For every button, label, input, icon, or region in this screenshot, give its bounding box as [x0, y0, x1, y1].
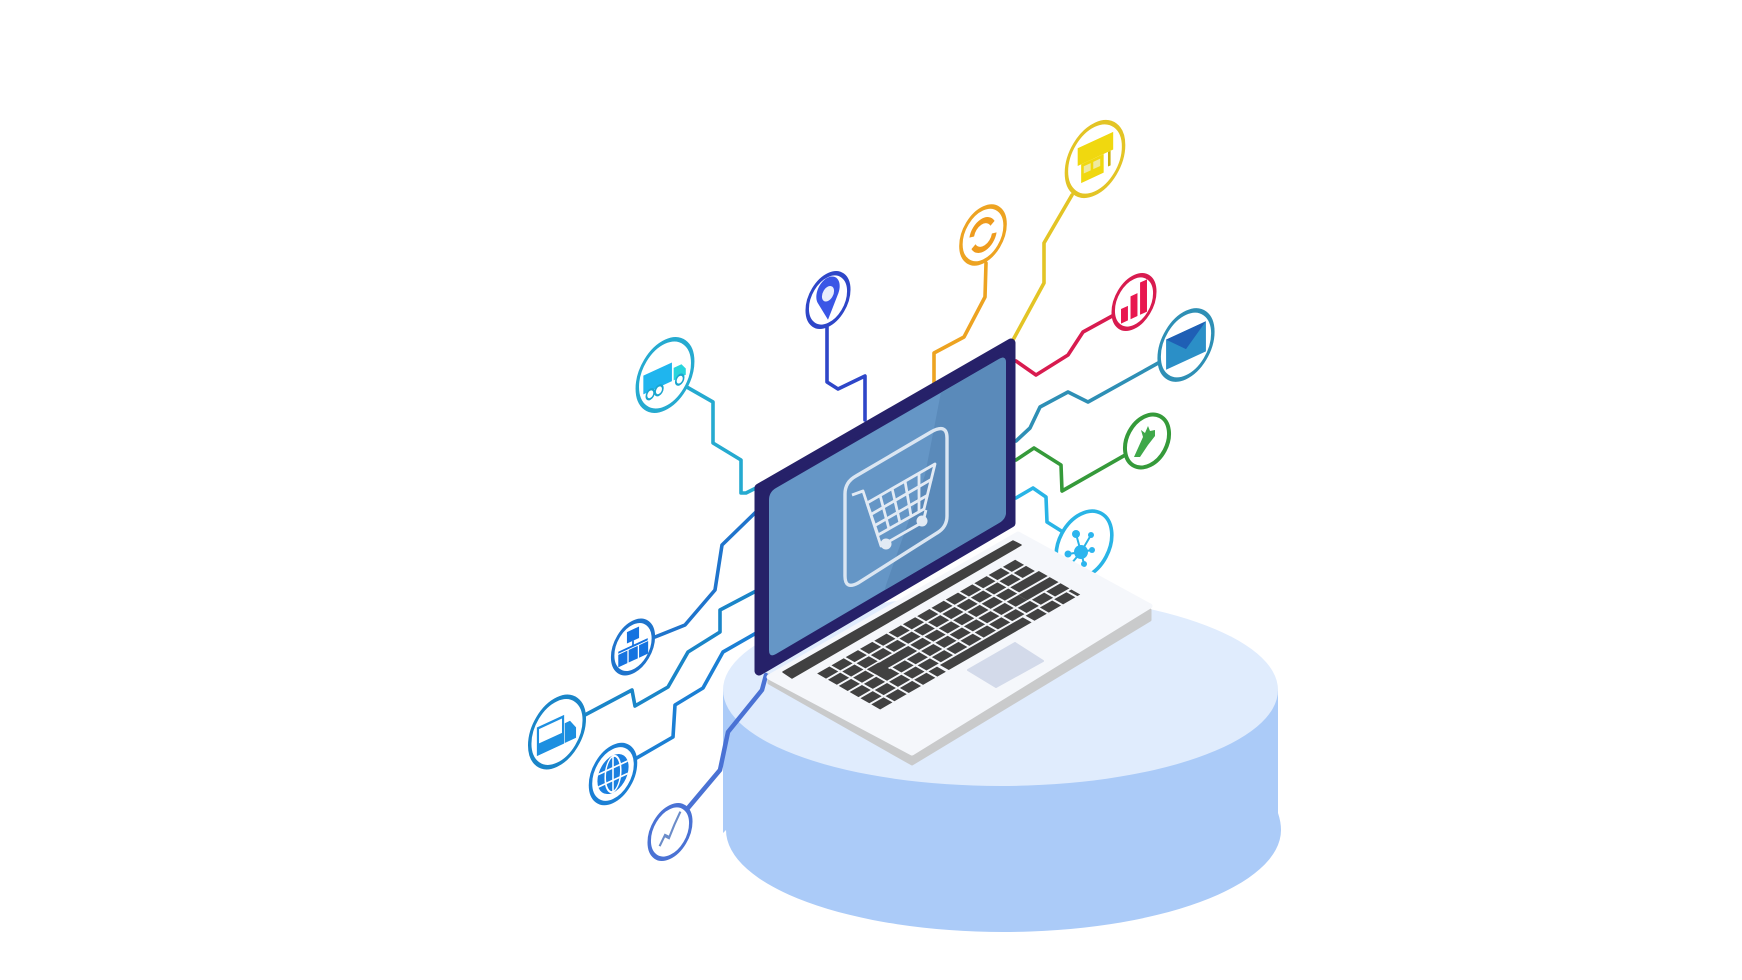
connector: store: [1013, 195, 1072, 340]
connector: boxes: [655, 510, 758, 637]
connector: location pin: [827, 327, 865, 420]
icon: forklift: [530, 687, 584, 777]
icon: bar chart: [1113, 267, 1155, 337]
icon: hand: [1116, 407, 1178, 475]
shopping cart icon: [852, 464, 935, 550]
icon: truck: [637, 329, 693, 421]
trackpad: [968, 643, 1043, 687]
icon: network: [1045, 501, 1123, 589]
connector: mail: [1016, 362, 1160, 441]
platform cylinder: [723, 594, 1281, 932]
connector: forklift: [583, 590, 758, 716]
laptop base: [769, 534, 1150, 764]
cart tile: [845, 429, 947, 585]
icon: store: [1066, 111, 1124, 207]
speaker strip: [783, 541, 1021, 678]
icon: mail: [1159, 300, 1213, 390]
icon: boxes: [613, 613, 653, 681]
connector: hand: [1016, 448, 1127, 491]
laptop screen: [759, 343, 1011, 671]
connector: globe: [635, 632, 758, 759]
icon: globe: [590, 737, 636, 811]
icon: refresh: [961, 198, 1005, 272]
keyboard: [822, 561, 1076, 707]
connector: growth chart: [688, 675, 766, 808]
connector: network: [1016, 488, 1063, 532]
icon: location pin: [807, 265, 849, 335]
connector: bar chart: [1016, 315, 1114, 375]
icon: growth chart: [649, 797, 691, 867]
connector: truck: [685, 386, 758, 493]
connector: refresh: [934, 263, 986, 384]
illustration: laptop with e-commerce icons on platform: [528, 120, 1281, 932]
